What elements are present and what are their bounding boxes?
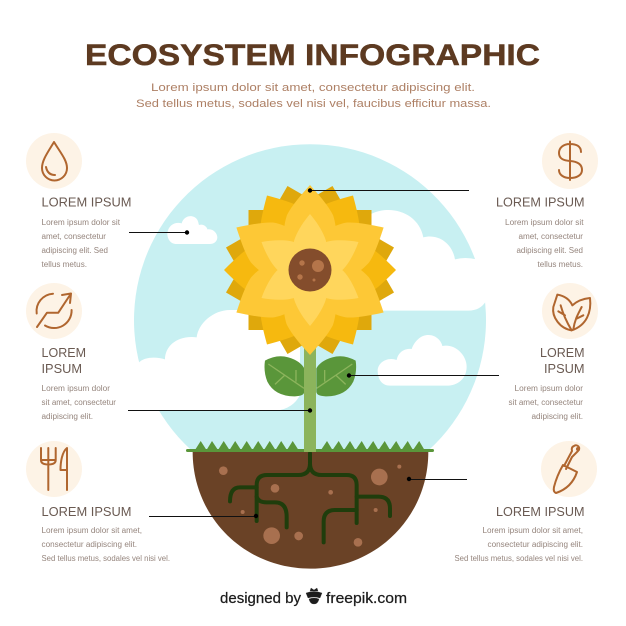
body text: Lorem ipsum dolor (42, 384, 110, 393)
leaves (265, 356, 356, 396)
panel: soil tools (454, 441, 597, 563)
icon: water drop (42, 142, 67, 180)
body text: adipiscing elit. (42, 412, 93, 421)
body text (508, 384, 583, 421)
heading (42, 346, 86, 376)
body text: consectetur adipiscing elit. (42, 540, 137, 549)
title: ECOSYSTEM INFOGRAPHIC (85, 39, 540, 72)
subtitle: Lorem ipsum dolor sit amet, consectetur adipiscing elit. (151, 82, 475, 94)
body text: sit amet, consectetur (508, 398, 583, 407)
panel: food (26, 441, 170, 563)
panel: money (496, 133, 598, 269)
flower centre (288, 248, 332, 292)
body text (42, 384, 116, 421)
body text (505, 218, 584, 269)
body text: amet, consectetur (518, 232, 583, 241)
body text: Sed tellus metus, sodales vel nisi vel. (454, 554, 583, 563)
body text: Lorem ipsum dolor sit (42, 218, 121, 227)
icon: fork and knife (41, 448, 67, 490)
body text: amet, consectetur (42, 232, 106, 241)
icon: leaves (553, 295, 590, 330)
middle petals (224, 182, 396, 358)
clouds (130, 210, 498, 411)
heading: IPSUM (42, 362, 82, 376)
body text: adipiscing elit. Sed (42, 246, 108, 255)
back petals (226, 186, 394, 354)
icon: trowel (554, 445, 579, 493)
footer credit: freepik.com (326, 590, 407, 607)
heading: LOREM (42, 346, 86, 360)
heading: LOREM IPSUM (496, 505, 584, 519)
sunflower (223, 182, 397, 358)
body text: tellus metus. (538, 260, 583, 269)
footer credit (220, 588, 407, 607)
heading: IPSUM (544, 362, 584, 376)
soil stones (219, 465, 401, 547)
body text: consectetur adipiscing elit. (488, 540, 583, 549)
right leaf (316, 356, 356, 396)
left leaf (265, 356, 304, 396)
body text: adipiscing elit. (532, 412, 583, 421)
body text (42, 526, 170, 563)
grass (186, 441, 434, 452)
front petals (223, 185, 397, 355)
soil hemisphere (193, 452, 428, 569)
body text: Lorem ipsum dolor sit amet, (42, 526, 142, 535)
body text: Lorem ipsum dolor sit amet, (482, 526, 583, 535)
panel: plants (508, 283, 598, 421)
body text: sit amet, consectetur (42, 398, 116, 407)
stem (304, 345, 316, 452)
body text: tellus metus. (42, 260, 87, 269)
body text: Lorem ipsum dolor (514, 384, 583, 393)
sky circle (134, 144, 486, 456)
heading: LOREM IPSUM (42, 505, 132, 519)
heading (540, 346, 584, 376)
icon: dollar (559, 142, 582, 180)
footer credit: designed by (220, 590, 301, 607)
panel: growth (26, 283, 116, 421)
body text: Sed tellus metus, sodales vel nisi vel. (42, 554, 170, 563)
body text: adipiscing elit. Sed (516, 246, 583, 255)
roots (230, 453, 390, 542)
body text (42, 218, 121, 269)
body text: Lorem ipsum dolor sit (505, 218, 584, 227)
heading: LOREM IPSUM (42, 196, 132, 210)
subtitle (136, 82, 491, 110)
body text (454, 526, 583, 563)
icon: freepik logo (306, 588, 322, 604)
panel: water (26, 133, 132, 269)
leader lines (128, 188, 499, 518)
heading: LOREM (540, 346, 584, 360)
inner petals (253, 214, 367, 326)
icon: growth arrow (37, 294, 72, 328)
heading: LOREM IPSUM (496, 196, 584, 210)
subtitle: Sed tellus metus, sodales vel nisi vel, faucibus efficitur massa. (136, 98, 491, 110)
